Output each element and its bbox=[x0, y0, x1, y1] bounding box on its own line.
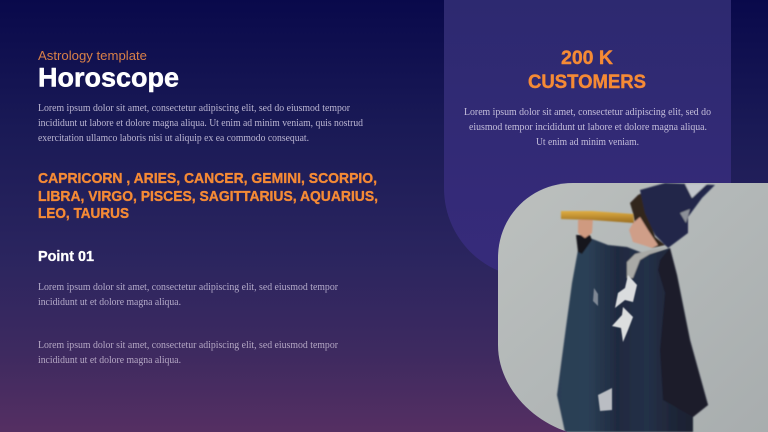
zodiac sign list: LIBRA, VIRGO, PISCES, SAGITTARIUS, AQUARIUS, bbox=[38, 189, 378, 205]
hat stars bbox=[685, 184, 707, 198]
customers stat heading: 200 K bbox=[561, 48, 613, 69]
hair bbox=[630, 193, 665, 248]
point heading: Point 01 bbox=[38, 249, 94, 265]
intro paragraph: incididunt ut labore et dolore magna aliqua. Ut enim ad minim veniam, quis nostrud bbox=[38, 117, 363, 129]
point paragraph 2: incididunt ut et dolore magna aliqua. bbox=[38, 354, 181, 366]
panel: customers bbox=[444, 0, 731, 278]
zodiac sign list: LEO, TAURUS bbox=[38, 206, 129, 222]
face bbox=[629, 217, 658, 248]
sleeve cuff bbox=[576, 235, 592, 254]
robe dark fold bbox=[658, 248, 708, 417]
robe bbox=[557, 238, 708, 432]
zodiac sign list: CAPRICORN , ARIES, CANCER, GEMINI, SCORPIO, bbox=[38, 171, 377, 187]
wizard hat bbox=[640, 183, 715, 248]
zodiac sign list bbox=[38, 171, 378, 222]
robe stars bbox=[615, 275, 637, 308]
hand bbox=[578, 218, 593, 238]
telescope bbox=[561, 211, 634, 223]
intro paragraph: exercitation ullamco laboris nisi ut aliquip ex ea commodo consequat. bbox=[38, 132, 309, 144]
customers stat heading bbox=[528, 48, 646, 93]
point paragraph 2 bbox=[38, 339, 338, 366]
customers stat heading: CUSTOMERS bbox=[528, 72, 646, 93]
point paragraph 2: Lorem ipsum dolor sit amet, consectetur adipiscing elit, sed eiusmod tempor bbox=[38, 339, 338, 351]
point paragraph 1: Lorem ipsum dolor sit amet, consectetur adipiscing elit, sed eiusmod tempor bbox=[38, 281, 338, 293]
intro paragraph bbox=[38, 102, 363, 144]
subtitle: Astrology template bbox=[38, 49, 147, 63]
customers paragraph: Lorem ipsum dolor sit amet, consectetur adipiscing elit, sed do bbox=[464, 106, 711, 118]
photo: child in wizard costume with telescope bbox=[498, 183, 768, 432]
title: Horoscope bbox=[38, 62, 179, 92]
collar bbox=[627, 247, 668, 278]
customers paragraph: Ut enim ad minim veniam. bbox=[536, 136, 639, 148]
heading block: horoscope bbox=[38, 49, 179, 92]
customers paragraph: eiusmod tempor incididunt ut labore et dolore magna aliqua. bbox=[469, 121, 707, 133]
point paragraph 1: incididunt ut et dolore magna aliqua. bbox=[38, 296, 181, 308]
customers paragraph bbox=[464, 106, 711, 148]
intro paragraph: Lorem ipsum dolor sit amet, consectetur adipiscing elit, sed do eiusmod tempor bbox=[38, 102, 350, 114]
point paragraph 1 bbox=[38, 281, 338, 308]
